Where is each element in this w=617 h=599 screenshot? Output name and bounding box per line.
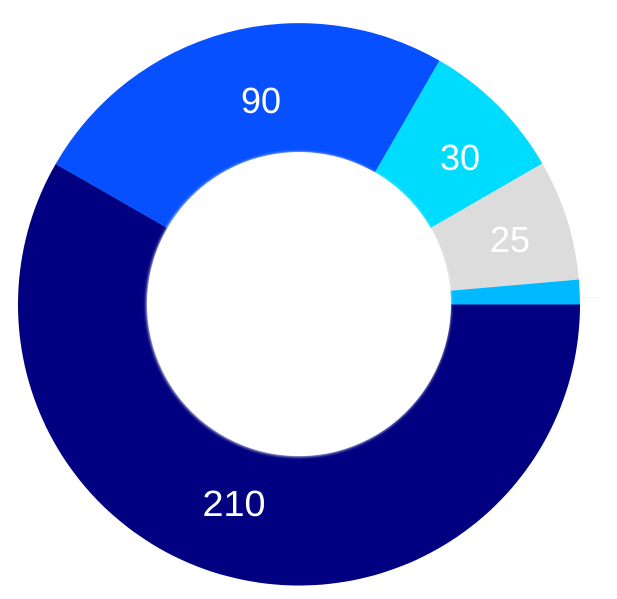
- label: 30: 30: [440, 137, 480, 178]
- label: 90: 90: [241, 80, 281, 121]
- donut hole: [146, 152, 450, 456]
- segment: small remainder: [450, 280, 580, 304]
- label: 210: 210: [202, 483, 266, 524]
- label: 25: 25: [490, 219, 530, 260]
- segment: 30: [375, 61, 542, 228]
- segment: 90: [56, 23, 440, 228]
- segment: 25: [431, 164, 579, 291]
